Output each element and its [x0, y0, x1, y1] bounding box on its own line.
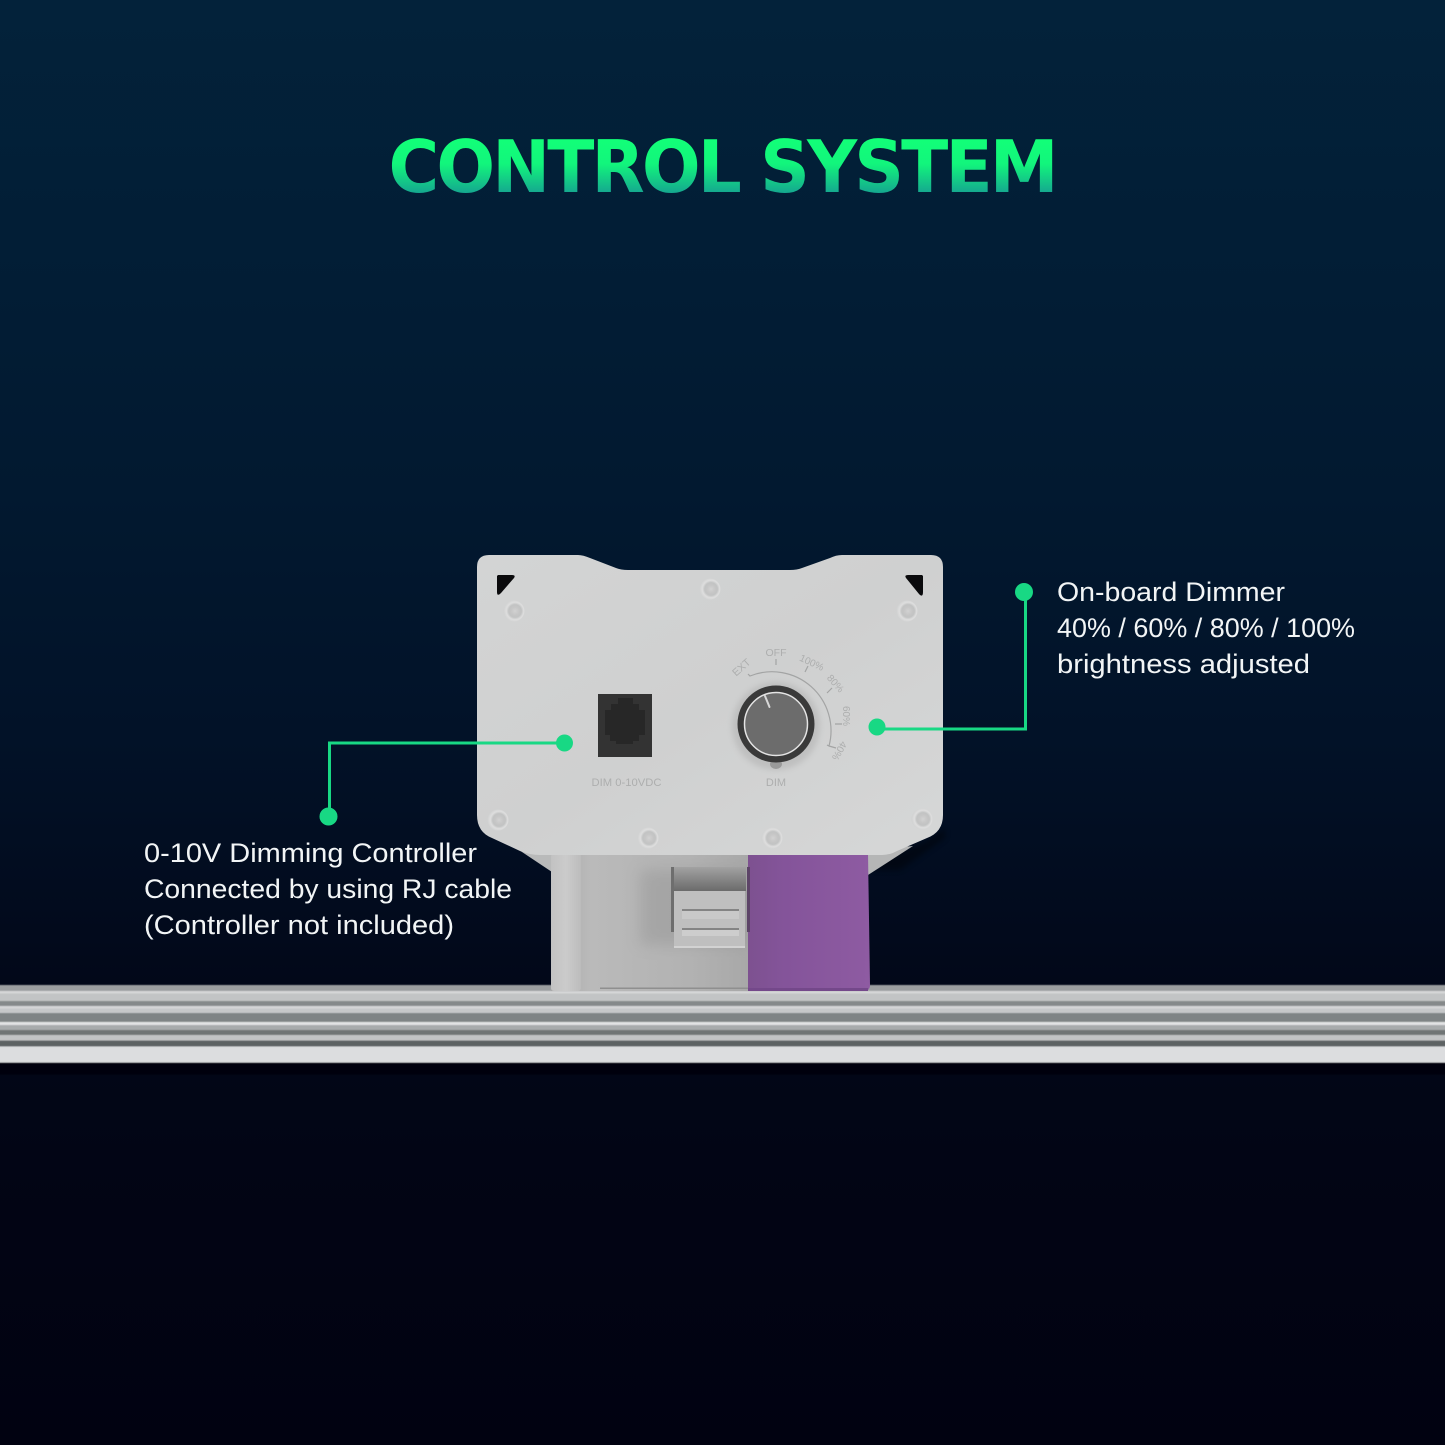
text: right callout: On-board Dimmer [1057, 577, 1285, 607]
mounting bracket wedges [513, 846, 913, 875]
dimmer scale [730, 647, 851, 762]
dimmer scale: EXT [730, 656, 754, 679]
light bar rail [0, 985, 1445, 1074]
dimmer scale: OFF [766, 647, 786, 659]
panel shadow [872, 828, 945, 870]
driver box [551, 853, 870, 991]
RJ port [598, 694, 652, 757]
product: controller unit [477, 555, 945, 991]
face panel [477, 555, 943, 855]
text: left callout: (Controller not included) [144, 910, 454, 940]
clip [674, 891, 745, 948]
purple section [748, 853, 870, 991]
dimmer scale: 80% [824, 673, 846, 695]
dimmer scale: 60% [840, 706, 851, 726]
dimmer scale: 40% [829, 739, 848, 762]
dimmer scale: 100% [797, 653, 825, 674]
clip recess [674, 867, 746, 891]
connector: right [877, 592, 1026, 729]
dimmer knob [732, 682, 820, 770]
text: right callout: 40% / 60% / 80% / 100% [1057, 613, 1355, 643]
callout: on-board dimmer [868, 577, 1363, 736]
text: left callout: 0-10V Dimming Controller [144, 838, 477, 868]
text: right callout: brightness adjusted [1057, 649, 1310, 679]
callout: RJ dimming controller [144, 734, 573, 940]
port label: DIM 0-10VDC [592, 777, 662, 789]
title: CONTROL SYSTEM [388, 125, 1059, 209]
text: left callout: Connected by using RJ cable [144, 874, 512, 904]
knob label: DIM [766, 777, 786, 789]
connector: left [330, 743, 564, 816]
